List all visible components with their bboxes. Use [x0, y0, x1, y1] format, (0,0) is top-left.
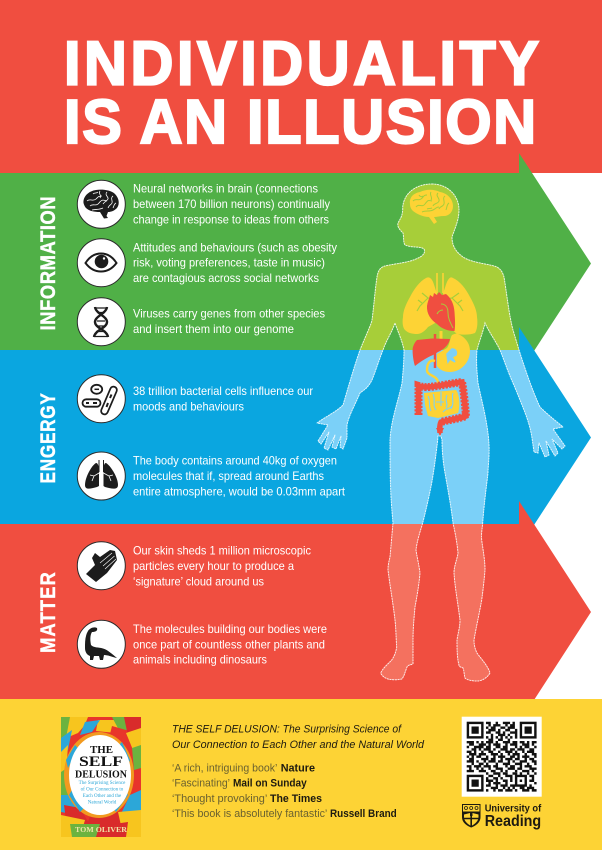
review quotes: ‘This book is absolutely fantastic’	[172, 808, 327, 820]
text: skin: Our skin sheds 1 million microscopic	[133, 545, 311, 558]
icon: dinosaur	[77, 620, 125, 668]
text: oxygen molecules: entire atmosphere, would be 0.03mm apart	[133, 485, 346, 498]
section label: MATTER: MATTER	[37, 572, 60, 653]
panel: matter arrow	[0, 501, 591, 699]
text: oxygen molecules: The body contains around 40kg of oxygen	[133, 455, 337, 468]
background: top red band	[0, 0, 602, 173]
review quotes: Russell Brand	[330, 808, 397, 820]
text: molecules: The molecules building our bodies were	[133, 623, 327, 636]
text: molecules: animals including dinosaurs	[133, 654, 267, 667]
book cover: The Surprising Science	[79, 781, 126, 786]
text: oxygen molecules: molecules that if, spread around Earths	[133, 470, 324, 483]
title	[64, 28, 539, 156]
book cover: THE	[90, 745, 113, 756]
organ: intestines	[418, 382, 466, 436]
text: viruses	[133, 308, 325, 336]
panel: energy arrow	[0, 327, 591, 548]
organ: brain	[410, 190, 453, 224]
text: attitudes: Attitudes and behaviours (such as obesity	[133, 241, 337, 254]
book title	[172, 724, 425, 751]
icon: DNA helix	[77, 298, 125, 346]
icon: brain	[77, 180, 125, 228]
text: molecules	[133, 623, 327, 667]
title: IS AN ILLUSION	[64, 87, 536, 156]
text: neural networks	[133, 183, 330, 226]
book cover: of Our Connection to	[81, 788, 124, 792]
organ: lungs and trachea	[403, 273, 477, 335]
text: oxygen molecules	[133, 455, 346, 498]
text: attitudes: are contagious across social networks	[133, 272, 319, 285]
icon: lungs	[77, 452, 125, 500]
review quotes: The Times	[270, 793, 322, 805]
organ: liver	[413, 334, 450, 368]
logo: University of Reading: Reading	[485, 813, 541, 830]
text: neural networks: between 170 billion neurons) continually	[133, 198, 330, 211]
QR code	[462, 717, 542, 797]
icon: hand	[77, 542, 125, 590]
section label: INFORMATION: INFORMATION	[37, 196, 60, 330]
book cover	[61, 717, 141, 837]
panel: information arrow	[0, 153, 591, 374]
text: viruses: and insert them into our genome	[133, 323, 294, 336]
book cover: DELUSION	[75, 768, 127, 780]
book title: Our Connection to Each Other and the Natural World	[172, 739, 425, 751]
organ: small tube	[427, 361, 438, 386]
review quotes	[172, 762, 397, 820]
review quotes: ‘Fascinating’	[172, 778, 230, 790]
human body silhouette	[317, 184, 565, 681]
text: bacterial cells: 38 trillion bacterial cells influence our	[133, 385, 313, 398]
title: INDIVIDUALITY	[64, 28, 539, 98]
book cover: Natural World	[88, 800, 117, 806]
text: neural networks: Neural networks in brain (connections	[133, 183, 318, 196]
text: neural networks: change in response to ideas from others	[133, 213, 329, 226]
text: viruses: Viruses carry genes from other species	[133, 308, 325, 321]
text: skin: particles every hour to produce a	[133, 560, 295, 573]
review quotes: ‘Thought provoking’	[172, 793, 267, 805]
text: attitudes: risk, voting preferences, taste in music)	[133, 257, 325, 270]
organ: heart	[427, 292, 455, 331]
logo: University of Reading	[462, 804, 542, 830]
organ: stomach	[437, 331, 470, 372]
book cover: SELF	[79, 754, 123, 770]
text: skin	[133, 545, 311, 588]
panel: footer band	[0, 699, 602, 850]
text: bacterial cells: moods and behaviours	[133, 400, 244, 413]
book cover: TOM OLIVER	[75, 825, 128, 834]
section label: ENGERGY: ENGERGY	[36, 393, 61, 484]
book cover: Each Other and the	[83, 794, 122, 799]
text: molecules: once part of countless other plants and	[133, 638, 325, 651]
review quotes: Mail on Sunday	[233, 778, 307, 790]
review quotes: Nature	[281, 762, 315, 774]
logo: University of Reading: University of	[485, 804, 542, 815]
text: attitudes	[133, 241, 337, 285]
icon: bacteria	[77, 375, 125, 423]
text: skin: ‘signature’ cloud around us	[133, 575, 264, 588]
icon: eye	[77, 239, 125, 287]
text: bacterial cells	[133, 385, 313, 413]
review quotes: ‘A rich, intriguing book’	[172, 762, 277, 774]
book title: THE SELF DELUSION: The Surprising Science of	[172, 724, 403, 736]
